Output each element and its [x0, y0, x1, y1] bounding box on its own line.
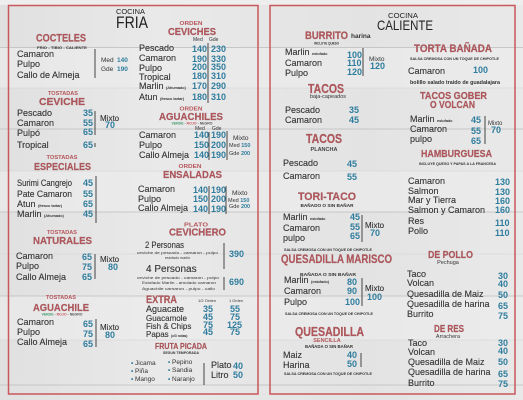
section: hamburguesa: Pollo [408, 226, 428, 236]
section: tostadas ceviche: 35 [83, 108, 93, 118]
section: quesadilla marisco: Marlin (estofado) [284, 275, 330, 285]
section: tostadas especiales [17, 155, 96, 223]
section: ceviches: 230 [211, 44, 226, 54]
section: extra: Aguacate [146, 304, 184, 314]
section: plato cevichero [137, 222, 244, 291]
section: tacos plancha: TACOS [306, 132, 342, 146]
section: tostadas especiales: 45 [83, 178, 93, 188]
section: extra: 1/2 Orden [198, 298, 216, 303]
section: fruta picada: Pepino [172, 359, 193, 366]
section: fruta picada: • [168, 367, 171, 374]
section: fruta picada [131, 341, 243, 385]
section: aguachiles: Med 150 [229, 143, 250, 149]
section: de res: Taco [408, 338, 427, 348]
section: tostadas ceviche: TOSTADAS [48, 91, 78, 97]
section: extra: Papas (c/3 notas) [146, 330, 187, 339]
section: tori-taco: SALSA CREMOSA CON UN TOQUE DE CHIPOTLE [284, 248, 372, 252]
section: ceviches: Tropical [139, 72, 171, 82]
section: tostadas aguachile: Callo Almeja [17, 337, 67, 347]
section: tori-taco: Mixto [365, 221, 385, 230]
section: tacos gober o volcan: 55 [471, 126, 481, 136]
section: aguachiles: AGUACHILES [159, 111, 223, 123]
section: ensaladas: Gde 200 [229, 204, 250, 210]
section: extra: 75 [203, 320, 213, 330]
section: tostadas aguachile: 80 [105, 330, 115, 340]
section: ensaladas: 140 [193, 185, 208, 195]
section: extra: Fish & Chips [146, 322, 191, 331]
section: quesadilla marisco: QUESADILLA MARISCO [281, 254, 392, 266]
section: cocteles: 140 [117, 57, 128, 64]
section: tostadas aguachile: 75 [83, 329, 93, 339]
section: tacos gober o volcan: TACOS GOBER [420, 90, 487, 102]
section: tacos plancha [283, 132, 357, 182]
section: quesadilla marisco: Pulpo [284, 297, 307, 307]
section: tacos baja-capeados: TACOS [308, 82, 344, 96]
section: tostadas ceviche [17, 91, 120, 150]
section: de pollo: 40 [498, 279, 508, 289]
section: de pollo: Quesadilla de Maiz [407, 289, 484, 299]
section: tacos plancha: 45 [347, 159, 357, 169]
section: quesadilla sencilla [283, 325, 372, 376]
section: de pollo [407, 249, 508, 321]
section: tacos baja-capeados: Pescado [285, 105, 320, 115]
section: tacos gober o volcan: O VOLCAN [430, 99, 475, 111]
section: tostadas ceviche: 55 [83, 118, 93, 128]
section: extra: EXTRA [146, 294, 177, 306]
section: tori-taco: Camaron [283, 223, 320, 233]
section: ceviches: 310 [211, 71, 226, 81]
section: burrito: 120 [347, 67, 362, 77]
section: ensaladas: Callo Almeja [138, 203, 188, 213]
section: ensaladas: 190 [211, 185, 226, 195]
section: tostadas aguachile [17, 295, 120, 349]
section: tacos baja-capeados: 35 [349, 105, 359, 115]
section: burrito: Mixto [369, 56, 385, 63]
section: de res: Burrito [408, 378, 435, 388]
section: ceviches: 190 [192, 54, 207, 64]
section: ensaladas: 150 [193, 194, 208, 204]
section: tostadas especiales: 45 [83, 209, 93, 219]
section: fruta picada: • [168, 359, 171, 366]
section: tostadas aguachile: 65 [83, 339, 93, 349]
section: fruta picada: Plato [211, 360, 232, 370]
section: tori-taco [283, 191, 385, 252]
section: de pollo: Taco [407, 269, 426, 279]
section: ceviches: ORDEN [180, 21, 203, 27]
section: hamburguesa: 110 [495, 218, 510, 228]
section: quesadilla marisco: Mixto [365, 284, 385, 293]
section: de res: Quesadilla de Maiz [408, 357, 485, 367]
section: ensaladas: ENSALADAS [163, 169, 222, 181]
section: tostadas naturales: 75 [82, 262, 92, 272]
section: aguachiles: Callo Almeja [139, 150, 189, 160]
section: hamburguesa: Mar y Tierra [408, 195, 456, 205]
section: hamburguesa: Res [408, 216, 425, 226]
heading: cocina fria: COCINA [116, 7, 145, 16]
section: aguachiles: 200 [211, 140, 226, 150]
section: plato cevichero: 4 Personas [146, 264, 197, 275]
section: tacos plancha: 55 [347, 172, 357, 182]
section: tori-taco: 55 [350, 222, 360, 232]
section: plato cevichero: ceviche de pescado - camaron - pulpo [137, 250, 219, 255]
section: quesadilla sencilla: 50 [347, 359, 357, 369]
section: tacos baja-capeados: baja-capeados [310, 94, 346, 100]
section: burrito: Marlin estofado [285, 47, 328, 57]
section: ensaladas [138, 164, 250, 214]
section: aguachiles: 140 [194, 150, 209, 160]
section: aguachiles: Med [195, 126, 205, 132]
section: tostadas aguachile: TOSTADAS [46, 295, 76, 301]
section: tacos gober o volcan: Mixto [488, 121, 503, 127]
section: aguachiles: 190 [211, 130, 226, 140]
section: ensaladas: 200 [211, 194, 226, 204]
section: fruta picada: Sandia [172, 367, 193, 374]
section: tostadas especiales: Atun (fresco tartar) [17, 199, 63, 209]
section: hamburguesa: 130 [495, 187, 510, 197]
section: quesadilla sencilla: Harina [283, 360, 310, 370]
section: tacos baja-capeados: 45 [349, 115, 359, 125]
section: hamburguesa: Salmon [408, 186, 439, 196]
section: tostadas naturales: NATURALES [33, 235, 92, 247]
section: extra: 125 [227, 320, 242, 330]
section: hamburguesa: 160 [495, 205, 510, 215]
section: tostadas especiales: Surimi Cangrejo [17, 178, 72, 188]
section: quesadilla marisco: Camaron [284, 286, 321, 296]
section: quesadilla marisco: SALSA CREMOSA CON UN TOQUE DE CHIPOTLE [285, 312, 373, 316]
section: extra: Guacamole [146, 314, 187, 323]
section: aguachiles: 190 [211, 150, 226, 160]
section: quesadilla sencilla: BAÑADA O SIN BAÑAR [305, 343, 354, 349]
section: tostadas naturales: Callo Almeja [16, 272, 66, 282]
section: ensaladas: 140 [193, 204, 208, 214]
section: tacos gober o volcan: 65 [471, 136, 481, 146]
section: tostadas naturales: 80 [108, 262, 118, 272]
section: tostadas naturales: Mixto [100, 255, 120, 264]
section: aguachiles: Gde 200 [229, 151, 250, 157]
section: de res: 50 [498, 357, 508, 367]
section: torta banada: bolillo salado traido de guadalajara [410, 80, 501, 86]
section: tostadas ceviche: CEVICHE [39, 96, 85, 108]
section: fruta picada: SEGUN TEMPORADA [163, 351, 199, 355]
section: burrito [285, 30, 385, 78]
section: tacos gober o volcan: pulpo [410, 134, 432, 144]
section: quesadilla sencilla: QUESADILLA [295, 325, 364, 339]
section: ceviches: Pescado [139, 43, 174, 53]
section: aguachiles: Gde [212, 126, 222, 132]
section: tostadas especiales: Marlin (Ahumado) [17, 209, 64, 219]
heading: cocina caliente: COCINA [388, 11, 418, 20]
section: burrito: Pulpo [285, 68, 308, 78]
section: hamburguesa: INCLUYE QUESO Y PAPAS A LA FRANCESA [419, 162, 496, 166]
section: ceviches: Med [193, 37, 203, 43]
section: torta banada [408, 42, 501, 86]
section: cocteles: Gde [101, 66, 114, 73]
section: torta banada: TORTA BAÑADA [414, 42, 492, 55]
section: ceviches: 170 [192, 81, 207, 91]
section: de res: Quesadilla de harina [408, 367, 491, 377]
section: torta banada: Camaron [408, 66, 445, 76]
heading: cocina fria: FRIA [116, 14, 148, 32]
section: fruta picada: • [131, 368, 134, 375]
section: cocteles [17, 32, 128, 80]
section: de pollo: Pechuga [437, 260, 460, 266]
section: fruta picada: 50 [233, 370, 243, 380]
section: ensaladas: 190 [211, 204, 226, 214]
section: tostadas ceviche: 70 [105, 120, 115, 130]
section: extra: 1 Orden [229, 298, 243, 303]
section: ensaladas: ORDEN [178, 164, 202, 170]
section: hamburguesa: 160 [495, 196, 510, 206]
section: ceviches: Gde [209, 37, 219, 43]
section: quesadilla sencilla: SALSA CREMOSA CON UN TOQUE DE CHIPOTLE [284, 372, 372, 376]
section: ceviches: 200 [192, 62, 207, 72]
section: tostadas especiales: TOSTADAS [46, 155, 78, 161]
section: torta banada: 100 [473, 65, 488, 75]
section: de res: Arrachera [436, 334, 461, 340]
panel: cocina fria [8, 6, 258, 394]
section: ensaladas: Mixto [232, 190, 248, 197]
section: tostadas ceviche: Pulpó [17, 128, 40, 138]
section: tostadas especiales: 65 [83, 199, 93, 209]
section: tostadas ceviche: Camaron [17, 118, 54, 128]
section: tori-taco: 65 [350, 231, 360, 241]
section: tostadas naturales: Pulpo [16, 261, 39, 271]
section: tostadas aguachile: VERDE - ROJO - NEGRO [41, 312, 83, 316]
section: extra: 55 [230, 304, 240, 314]
panel: cocina caliente [270, 6, 515, 394]
section: cocteles: Callo de Almeja [17, 70, 80, 80]
section: cocteles: COCTELES [36, 32, 86, 44]
section: tostadas naturales [16, 230, 120, 282]
section: de pollo: Volcan [407, 278, 434, 288]
heading: cocina caliente [377, 11, 433, 33]
section: de res: 65 [498, 369, 508, 379]
section: quesadilla sencilla: SENCILLA [313, 338, 341, 344]
section: hamburguesa: 110 [495, 228, 510, 238]
section: de res: 30 [498, 338, 508, 348]
section: tostadas aguachile: Pulpo [17, 327, 40, 337]
section: cocteles: Camaron [17, 49, 54, 59]
section: tacos gober o volcan: 45 [471, 115, 481, 125]
section: plato cevichero: 2 Personas [145, 240, 184, 250]
section: tori-taco: Marlin estofado [283, 212, 326, 222]
section: fruta picada: Piña [135, 368, 148, 375]
section: cocteles: Med [101, 57, 114, 64]
section: extra: 75 [230, 312, 240, 322]
section: tacos gober o volcan: Marlin estofado [410, 114, 453, 124]
section: fruta picada: FRUTA PICADA [155, 341, 207, 351]
section: ceviches: 310 [211, 92, 226, 102]
section: hamburguesa: HAMBURGUESA [421, 148, 492, 160]
section: torta banada: SALSA CREMOSA CON UN TOQUE DE CHIPOTLE [410, 57, 499, 61]
section: de pollo: 30 [498, 271, 508, 281]
section: tacos baja-capeados [285, 82, 359, 125]
section: tostadas aguachile: 65 [83, 319, 93, 329]
section: tostadas especiales: ESPECIALES [34, 161, 91, 173]
section: de pollo: DE POLLO [428, 249, 473, 261]
section: plato cevichero: Estofado Marlin - amolado camaron [142, 280, 216, 285]
section: aguachiles: 140 [194, 130, 209, 140]
section: ensaladas: Pulpo [138, 194, 161, 204]
section: tacos plancha: Camaron [283, 171, 320, 181]
section: quesadilla sencilla: Maiz [283, 350, 303, 360]
section: burrito: 120 [370, 61, 385, 71]
section: tostadas especiales: 55 [83, 189, 93, 199]
section: tacos gober o volcan [410, 90, 503, 146]
section: quesadilla marisco: BAÑADA O SIN BAÑAR [300, 271, 357, 277]
section: tostadas aguachile: AGUACHILE [33, 302, 89, 314]
heading: cocina caliente: CALIENTE [377, 17, 433, 33]
section: burrito: 110 [347, 58, 362, 68]
section: ensaladas: Med 150 [228, 198, 249, 204]
section: tostadas naturales: 65 [82, 252, 92, 262]
section: aguachiles: VERDE - ROJO - NEGRO [171, 122, 213, 126]
section: ceviches: 180 [192, 92, 207, 102]
section: de res: Volcan [408, 347, 435, 357]
section: de pollo: 65 [498, 301, 508, 311]
section: aguachiles: ORDEN [180, 106, 203, 112]
section: fruta picada: Naranjo [172, 376, 195, 383]
section: cocteles: Pulpo [17, 59, 40, 69]
section: quesadilla marisco: 90 [347, 286, 357, 296]
section: ceviches: Atun (fresco tartar) [139, 92, 185, 102]
heading: cocina fria [116, 7, 148, 32]
section: ceviches: 180 [192, 71, 207, 81]
section: tacos plancha: PLANCHA [311, 147, 337, 153]
section: tostadas ceviche: Mixto [100, 114, 120, 123]
section: fruta picada: • [131, 376, 134, 383]
section: ceviches: 330 [211, 54, 226, 64]
section: de res [408, 323, 508, 389]
section: hamburguesa: Salmon y Camaron [408, 205, 485, 215]
section: extra: 45 [203, 327, 213, 337]
section: tostadas naturales: 65 [82, 272, 92, 282]
section: aguachiles: 150 [194, 140, 209, 150]
section: tacos plancha: Pescado [283, 158, 318, 168]
section: de res: DE RES [434, 323, 464, 335]
section: fruta picada: Litro [211, 370, 229, 380]
section: extra: 35 [203, 304, 213, 314]
section: ceviches: CEVICHES [168, 26, 216, 38]
section: fruta picada: Mango [135, 376, 155, 383]
section: tori-taco: BAÑADO O SIN BAÑAR [300, 202, 354, 208]
section: fruta picada: • [168, 376, 171, 383]
section: de pollo: Burrito [407, 309, 434, 319]
section: de pollo: 50 [498, 290, 508, 300]
section: cocteles: 190 [117, 66, 128, 73]
section: burrito: 100 [347, 50, 362, 60]
section: ceviches: 350 [211, 62, 226, 72]
section: fruta picada: 40 [233, 361, 243, 371]
section: ceviches [139, 21, 226, 103]
section: tostadas especiales: Pate Camaron [17, 189, 72, 199]
section: plato cevichero: ceviche de pescado - camaron - pulpo [137, 275, 220, 280]
section: quesadilla marisco: 80 [347, 277, 357, 287]
section: plato cevichero: Aguachile camaron - pulpo - callo [142, 286, 216, 291]
section: aguachiles: Mixto [233, 135, 249, 142]
section: tostadas aguachile: Mixto [100, 323, 120, 332]
section: tori-taco: pulpo [283, 233, 305, 243]
section: plato cevichero: CEVICHERO [169, 226, 226, 238]
section: ceviches: Marlin (Ahumado) [139, 81, 186, 91]
section: quesadilla marisco [281, 254, 392, 316]
section: tacos baja-capeados: Camaron [285, 115, 322, 125]
section: extra [146, 294, 243, 339]
section: quesadilla sencilla: 40 [347, 350, 357, 360]
section: tacos gober o volcan: 70 [491, 125, 501, 135]
section: quesadilla marisco: 100 [367, 292, 382, 302]
section: burrito: BURRITO [305, 30, 348, 42]
section: ensaladas: Camaron [138, 184, 175, 194]
section: aguachiles [139, 106, 250, 160]
section: plato cevichero: PLATO [184, 222, 209, 228]
section: burrito: INCLUYE QUESO [314, 42, 339, 46]
section: tacos gober o volcan: Camaron [410, 124, 447, 134]
section: burrito: harina [351, 33, 371, 40]
section: hamburguesa: 130 [495, 177, 510, 187]
section: aguachiles: Pulpo [139, 140, 162, 150]
section: tostadas aguachile: Camaron [17, 317, 54, 327]
section: hamburguesa: Camaron [408, 176, 445, 186]
section: fruta picada: Jicama [135, 360, 156, 367]
section: de res: 75 [498, 379, 508, 389]
section: quesadilla marisco: 100 [345, 297, 360, 307]
section: tostadas ceviche: Tropical [17, 140, 49, 150]
section: tostadas ceviche: 65 [83, 127, 93, 137]
section: de pollo: 75 [498, 311, 508, 321]
section: tostadas naturales: Camaron [16, 251, 53, 261]
section: plato cevichero: 690 [229, 277, 244, 287]
section: tori-taco: 45 [350, 212, 360, 222]
section: plato cevichero: estofado marlin [165, 255, 190, 260]
section: cocteles: FRIO - TIBIO - CALIENTE [37, 46, 88, 50]
section: ceviches: Camaron [139, 53, 176, 63]
section: de pollo: Quesadilla de harina [407, 299, 490, 309]
section: tori-taco: TORI-TACO [298, 191, 356, 203]
section: tori-taco: 70 [370, 228, 380, 238]
section: extra: 75 [230, 327, 240, 337]
section: tostadas ceviche: 65 [83, 140, 93, 150]
section: de res: 40 [498, 346, 508, 356]
section: fruta picada: • [131, 360, 134, 367]
section: ceviches: Pulpo [139, 63, 162, 73]
section: aguachiles: Camaron [139, 130, 176, 140]
section: extra: 45 [203, 312, 213, 322]
section: burrito: Camaron [285, 58, 322, 68]
section: plato cevichero: 390 [229, 249, 244, 259]
section: ceviches: 140 [192, 44, 207, 54]
section: tostadas ceviche: Pescado [17, 108, 52, 118]
section: hamburguesa [408, 148, 510, 238]
section: tostadas naturales: TOSTADAS [47, 230, 77, 236]
section: ceviches: 290 [211, 81, 226, 91]
